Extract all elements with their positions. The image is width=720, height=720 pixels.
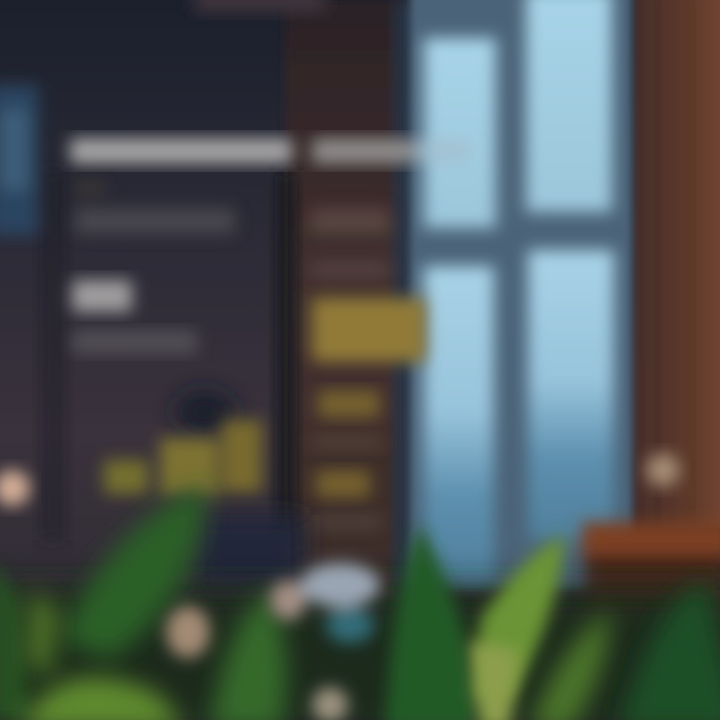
left wall window xyxy=(0,85,38,235)
yellow highlight: small 2 xyxy=(316,470,370,498)
person silhouette xyxy=(175,392,305,585)
yellow highlight: main xyxy=(312,298,426,362)
window pane: top right xyxy=(526,0,612,212)
wood text lines xyxy=(312,435,382,529)
window pane: bottom left xyxy=(424,266,494,586)
window pane: top left xyxy=(424,38,496,228)
heading xyxy=(70,138,470,164)
wall lamp right xyxy=(646,453,680,487)
window xyxy=(410,0,632,590)
window pane: bottom right xyxy=(528,250,614,540)
yellow highlight: small 1 xyxy=(318,390,380,418)
subheading text block xyxy=(75,182,390,278)
yellow highlight: left stepped xyxy=(104,420,262,496)
right wood wall xyxy=(634,0,720,530)
cushions and flowers xyxy=(166,563,380,720)
foreground plants xyxy=(0,485,720,720)
wooden table xyxy=(582,522,720,645)
small heading xyxy=(72,280,132,312)
body text block xyxy=(72,330,197,354)
lamp left xyxy=(0,470,30,506)
